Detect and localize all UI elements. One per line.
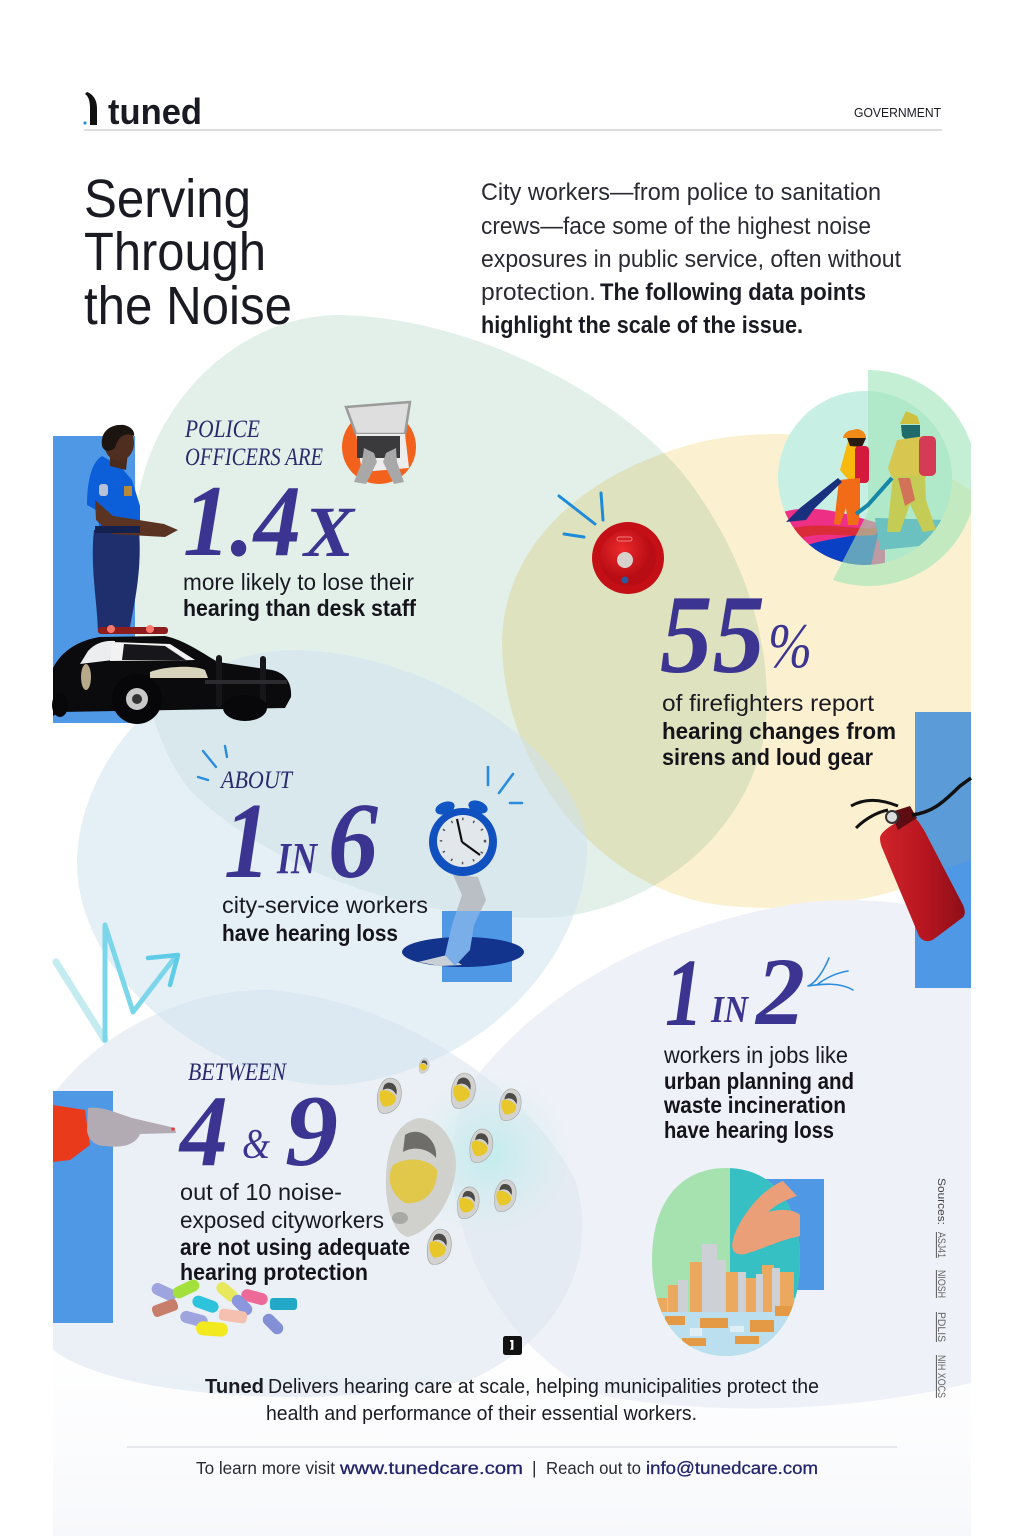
label — [184, 416, 323, 471]
panel: hearing protection — [53, 1058, 523, 1337]
description — [662, 690, 896, 770]
statistic: % — [768, 610, 812, 681]
accent ticks — [808, 958, 853, 990]
contact links: To learn more visit — [196, 1458, 335, 1478]
icon: alarm clock on hand — [402, 767, 524, 982]
description — [183, 569, 416, 621]
statistic: & — [242, 1122, 270, 1168]
panel: city-service workers — [198, 746, 524, 982]
icon: police car — [52, 625, 291, 724]
intro paragraph: crews—face some of the highest noise — [481, 213, 871, 240]
blue block — [53, 436, 135, 723]
sources: NIOSH — [935, 1270, 947, 1298]
intro paragraph: highlight the scale of the issue. — [481, 312, 803, 339]
sources: ASJ41 — [935, 1232, 947, 1258]
description: sirens and loud gear — [662, 744, 873, 770]
description: workers in jobs like — [663, 1042, 848, 1068]
icon: pointing hand — [53, 1105, 176, 1162]
background blobs — [53, 315, 971, 1408]
closing statement: Tuned — [205, 1376, 264, 1398]
sources — [935, 1178, 947, 1398]
sources: NIH XOCS — [935, 1355, 947, 1398]
intro paragraph — [481, 179, 901, 339]
description: of firefighters report — [662, 690, 875, 716]
description: have hearing loss — [664, 1117, 834, 1143]
icon: tuned mark — [503, 1336, 522, 1355]
icon: fire alarm — [559, 493, 664, 594]
title: the Noise — [84, 276, 292, 336]
description: are not using adequate — [180, 1234, 410, 1260]
sources: PDLIS — [935, 1312, 947, 1342]
title — [84, 169, 292, 336]
statistic: 4 — [178, 1075, 228, 1188]
description — [180, 1179, 410, 1285]
icon: police officer — [87, 425, 178, 632]
statistic: 1.4 — [183, 465, 301, 578]
contact links: info@tunedcare.com — [646, 1458, 818, 1478]
statistic: IN — [276, 834, 319, 883]
description: more likely to lose their — [183, 569, 414, 595]
description: hearing changes from — [662, 718, 896, 744]
description — [663, 1042, 854, 1143]
closing statement — [205, 1376, 819, 1425]
statistic: X — [302, 492, 356, 572]
description: waste incineration — [663, 1092, 846, 1118]
panel: firefighters — [559, 370, 976, 988]
label: BETWEEN — [188, 1059, 287, 1086]
description: hearing protection — [180, 1259, 368, 1285]
icon: city between fingers — [652, 1168, 824, 1362]
intro paragraph: The following data points — [600, 279, 866, 306]
icon: small ears — [375, 1058, 523, 1267]
icon: laptop — [342, 402, 416, 484]
contact links: | — [532, 1458, 537, 1478]
description: have hearing loss — [222, 920, 398, 946]
description: hearing than desk staff — [183, 595, 416, 621]
blue block — [915, 712, 971, 878]
category label: GOVERNMENT — [854, 105, 941, 120]
intro paragraph: City workers—from police to sanitation — [481, 179, 881, 206]
panel: urban planning and waste incineration — [652, 938, 854, 1362]
label: POLICE — [184, 416, 260, 443]
header — [83, 91, 942, 132]
statistic: 2 — [754, 938, 805, 1045]
statistic: 9 — [285, 1075, 338, 1188]
logo: tuned — [108, 91, 202, 132]
icon: fire extinguisher — [851, 778, 971, 941]
contact links: Reach out to — [546, 1458, 641, 1478]
description: out of 10 noise- — [180, 1179, 342, 1205]
sources: Sources: — [935, 1178, 947, 1225]
title: Serving — [84, 169, 251, 229]
label: OFFICERS ARE — [185, 444, 323, 471]
description: urban planning and — [664, 1068, 854, 1094]
intro paragraph: exposures in public service, often without — [481, 246, 901, 273]
contact links: www.tunedcare.com — [339, 1458, 523, 1478]
description — [222, 892, 428, 946]
contact links — [196, 1458, 818, 1478]
label: ABOUT — [219, 767, 294, 794]
icon: squiggle arrow — [56, 925, 178, 1040]
icon: earplugs — [150, 1278, 297, 1337]
finger detail — [732, 1181, 800, 1254]
statistic: 1 — [665, 939, 703, 1046]
statistic — [665, 938, 805, 1046]
statistic: 1 — [224, 782, 270, 901]
statistic: 6 — [328, 782, 378, 901]
blue block — [53, 1091, 113, 1323]
description: city-service workers — [222, 892, 428, 918]
intro paragraph: protection. — [481, 279, 596, 306]
panel: police officers — [52, 402, 416, 724]
icon: firefighters — [775, 370, 976, 586]
accent ticks — [198, 746, 227, 780]
statistic: IN — [710, 989, 749, 1031]
background panel — [53, 1250, 971, 1536]
closing statement: Delivers hearing care at scale, helping municipalities protect the — [268, 1376, 819, 1398]
title: Through — [84, 222, 266, 282]
statistic — [224, 782, 378, 901]
icon: large ear — [386, 1118, 456, 1237]
description: exposed cityworkers — [180, 1207, 384, 1233]
statistic — [178, 1075, 338, 1188]
statistic: 55 — [660, 573, 765, 697]
closing statement: health and performance of their essential workers. — [266, 1403, 697, 1425]
footer — [127, 1336, 897, 1478]
